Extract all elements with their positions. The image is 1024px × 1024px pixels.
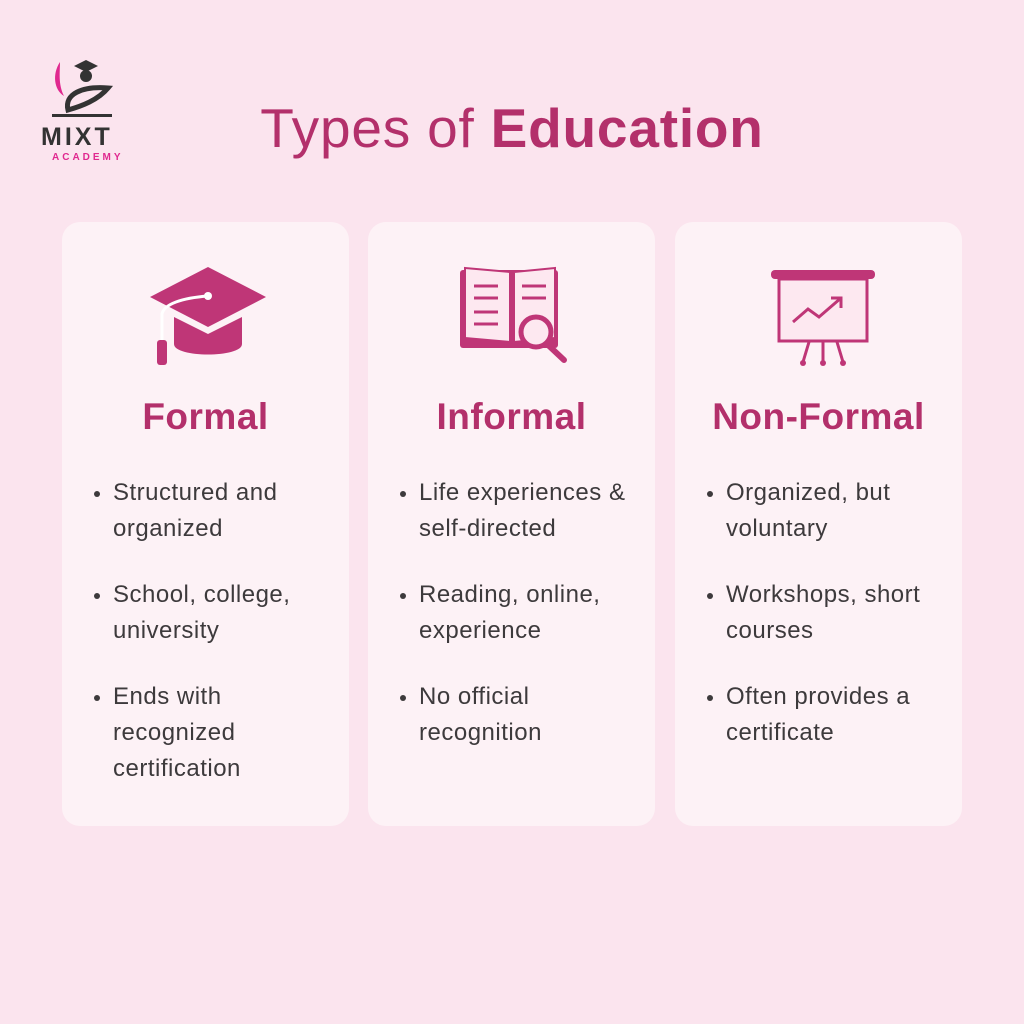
panel: non-formal [675, 222, 962, 826]
heading: Formal [142, 396, 269, 437]
bullets: recognition [419, 719, 542, 746]
bullets [707, 479, 920, 746]
bullets: Organized, but [726, 479, 890, 506]
logo [41, 60, 124, 163]
bullets: Workshops, short [726, 581, 920, 608]
bullets: Often provides a [726, 683, 910, 710]
bullets: organized [113, 515, 223, 542]
bullets: School, college, [113, 581, 290, 608]
bullets: Life experiences & [419, 479, 625, 506]
bullets: self-directed [419, 515, 556, 542]
bullets: experience [419, 617, 541, 644]
bullets [94, 479, 290, 782]
title: Types of Education [260, 97, 764, 159]
bullets [400, 479, 625, 746]
bullets: recognized [113, 719, 235, 746]
bullets: certification [113, 755, 241, 782]
bullets: Ends with [113, 683, 222, 710]
text: ACADEMY [52, 152, 124, 163]
bullets: university [113, 617, 219, 644]
icon: graduation cap [150, 267, 266, 365]
heading: Non-Formal [712, 396, 925, 437]
panel: informal [368, 222, 655, 826]
bullets: No official [419, 683, 529, 710]
logo: MIXT [41, 123, 113, 151]
icon: book with magnifier [460, 266, 567, 363]
bullets: courses [726, 617, 814, 644]
panel: formal [62, 222, 349, 826]
bullets: certificate [726, 719, 834, 746]
heading: Informal [437, 396, 586, 437]
bullets: Structured and [113, 479, 277, 506]
bullets: voluntary [726, 515, 828, 542]
icon: presentation board [771, 270, 875, 366]
bullets: Reading, online, [419, 581, 600, 608]
